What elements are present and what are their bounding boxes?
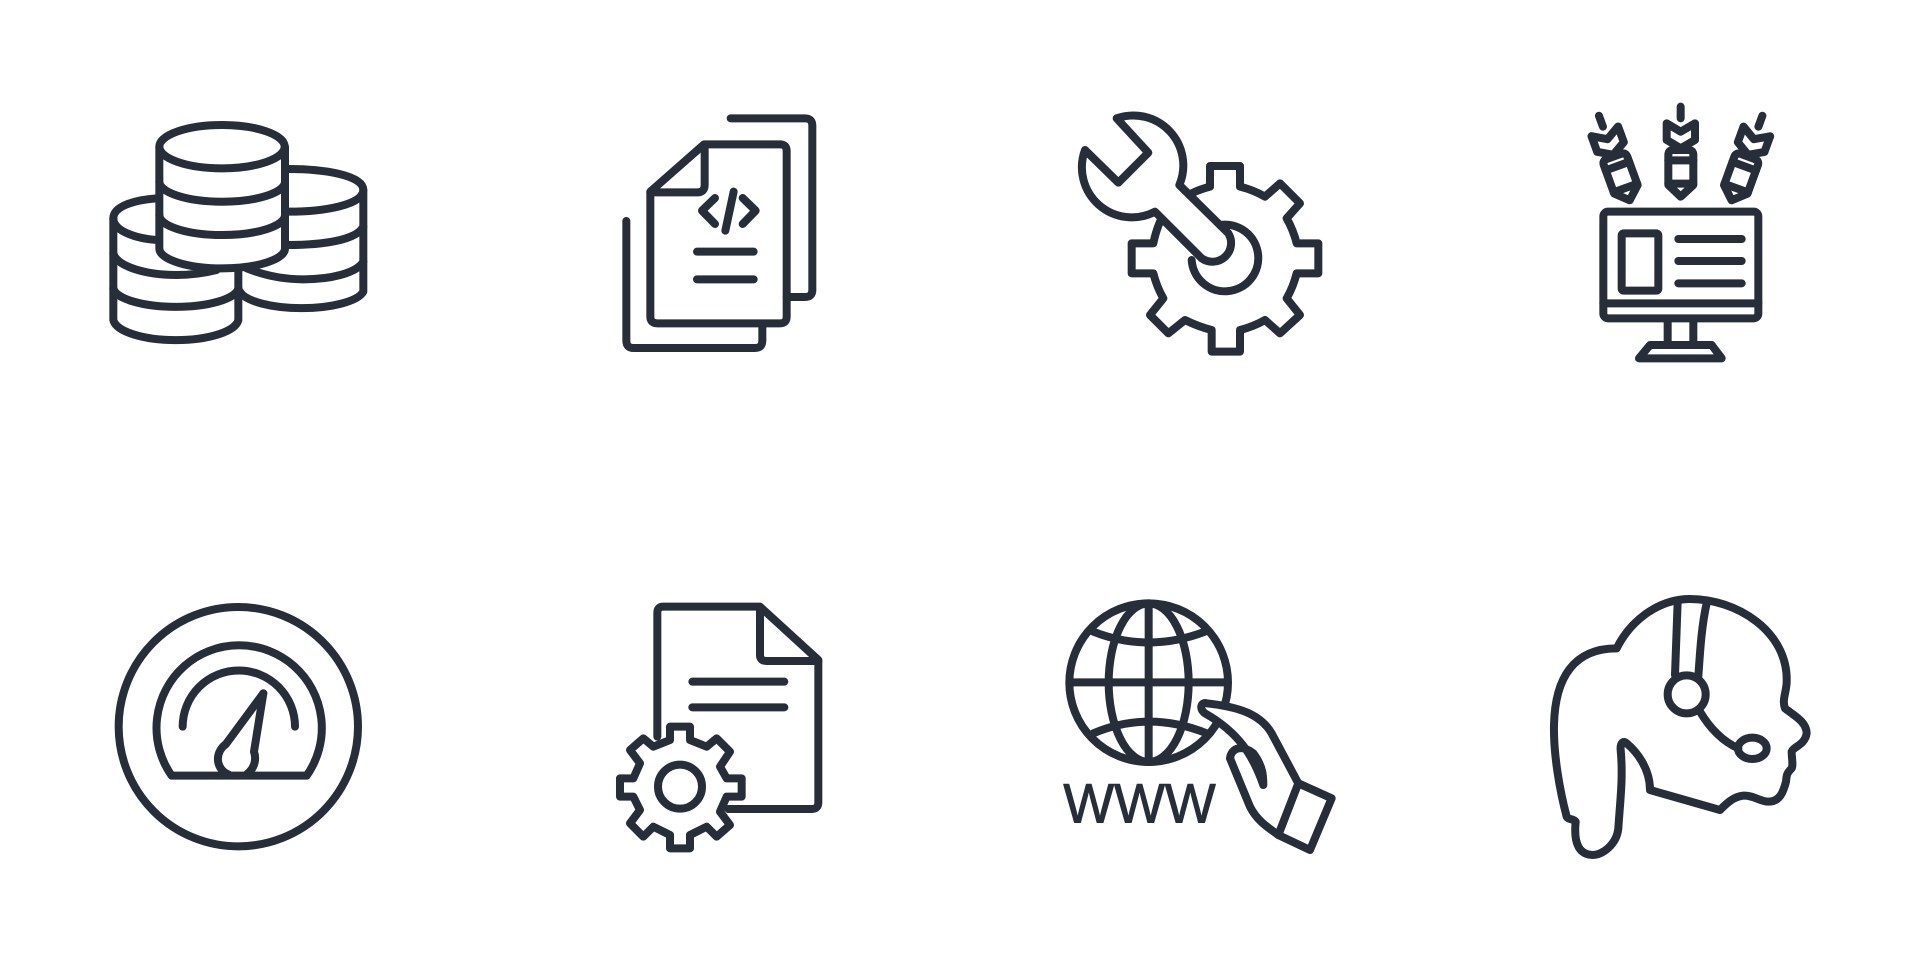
icon: wrench and gear (1082, 115, 1318, 352)
pencil: right (1718, 111, 1776, 205)
icon: monitor with pencils (1586, 107, 1776, 358)
globe (1069, 603, 1228, 762)
icon: database stacks (113, 125, 363, 340)
icon: code documents (626, 118, 812, 348)
icon: speedometer (119, 607, 358, 846)
pencil: centre (1667, 107, 1695, 197)
www label: WWW (1063, 772, 1216, 835)
pencil: left (1586, 111, 1643, 205)
icon: support agent with headset (1554, 599, 1807, 855)
icon: document with gear (620, 607, 818, 848)
hand (1201, 703, 1332, 850)
icon: globe, hand and www (1063, 603, 1332, 850)
monitor (1603, 212, 1758, 358)
